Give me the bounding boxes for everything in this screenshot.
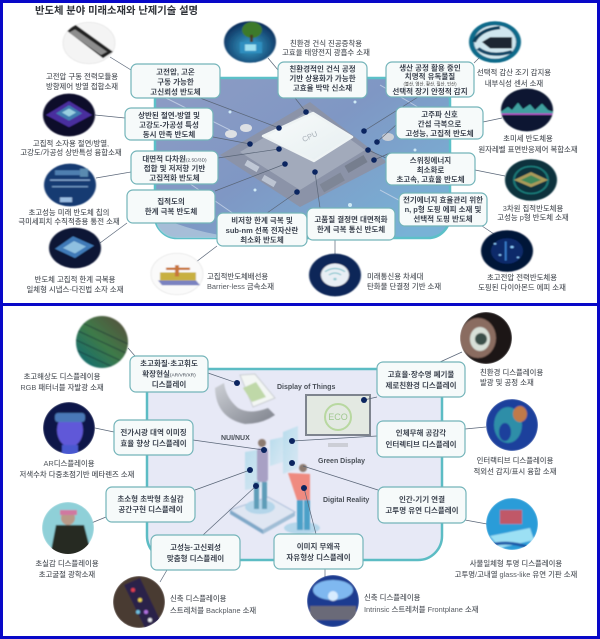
- box: switching energy: 스위칭에너지: [410, 155, 451, 165]
- box: toxic gas monitoring: 선택적 장기 안정적 감지: [392, 86, 468, 96]
- central display illustration: [147, 369, 442, 560]
- labels: 초고성능 미래 반도체 칩의: [29, 208, 109, 217]
- labels: 탄화물 단결정 기반 소재: [367, 282, 441, 291]
- icon: corrosion sensor: [469, 21, 521, 63]
- labels: 초실감 디스플레이용: [35, 559, 99, 568]
- panel: semiconductor materials: [3, 3, 597, 303]
- box: ultra-high resolution: 디스플레이: [152, 379, 186, 389]
- box: human-machine: 고투명 유연 디스플레이: [385, 505, 459, 515]
- box: ultra-thin: [106, 487, 195, 522]
- box: integration limit: [127, 190, 215, 223]
- icon: eye: [460, 312, 512, 364]
- central display illustration: Display of Things: [277, 384, 335, 391]
- box: electric energy: [399, 193, 487, 226]
- central display illustration: NUI/NUX: [221, 435, 250, 442]
- icon: stretchable frontplane: [307, 575, 359, 627]
- icon: diamond epi: [481, 230, 533, 272]
- icon: stretchable backplane: [113, 576, 165, 628]
- central display illustration: Green Display: [318, 458, 365, 465]
- box: contradictory properties: 동시 만족 반도체: [143, 129, 195, 139]
- labels: 고성능 p형 반도체 소재: [497, 213, 569, 222]
- labels: 저색수차 다중초점기반 메타렌즈 소재: [20, 470, 135, 479]
- labels: 스트레처블 Backplane 소재: [170, 606, 256, 615]
- box: integration limit: 한계 극복 반도체: [145, 206, 197, 216]
- box: eco: 제로친환경 디스플레이: [385, 380, 457, 390]
- box: contradictory properties: [125, 108, 213, 140]
- labels: 초미세 반도체용: [503, 134, 553, 143]
- labels: 사물일체형 투명 디스플레이용: [470, 559, 562, 568]
- box: large-area 3D: 접합 및 저저항 기반: [144, 163, 205, 173]
- box: high performance: 맞춤형 디스플레이: [167, 553, 224, 563]
- icon: transparent display: [486, 498, 538, 550]
- box: eco: 고효율·장수명 폐기물: [388, 369, 454, 379]
- labels: 적외선 감지/표시 융합 소재: [473, 467, 557, 476]
- box: visible band: [114, 420, 193, 455]
- labels: 미래통신용 차세대: [367, 272, 424, 281]
- box: toxic gas monitoring: (불산, 염산, 황산, 질산, 인산): [403, 80, 457, 88]
- box: high performance: [151, 535, 240, 570]
- box: high voltage: 고신뢰성 반도체: [150, 86, 201, 96]
- labels: 인터랙티브 디스플레이용: [477, 456, 554, 465]
- box: toxic gas monitoring: 치명적 유독물질: [405, 71, 455, 81]
- box: visible band: 전가시광 대역 이미징: [120, 427, 187, 437]
- labels: 방향제어 방열 접합소재: [46, 82, 118, 91]
- labels: 고집적 소자용 절연/방열,: [33, 139, 109, 148]
- labels: 친환경 건식 진공증착용: [290, 39, 362, 48]
- box: integration limit: 집적도의: [157, 196, 185, 206]
- box: free form: 자유형상 디스플레이: [286, 552, 351, 562]
- box: switching energy: 최소화로: [417, 164, 444, 174]
- box: dry process: [278, 62, 367, 98]
- labels: 초고굴절 광학소재: [39, 570, 95, 579]
- labels: AR디스플레이용: [43, 459, 95, 468]
- box: large-area 3D: 대면적 다차원(2.5D/3D): [142, 154, 207, 164]
- box: toxic gas monitoring: 생산 공정 활용 중인: [399, 62, 461, 72]
- people and holographic panels: [230, 426, 320, 534]
- labels: 원자레벨 표면반응제어 복합소재: [478, 145, 578, 154]
- icon: barrier-less metal: [151, 253, 203, 295]
- box: human-machine: 인간-기기 연결: [399, 494, 445, 504]
- labels: 3차원 집적반도체용: [503, 204, 563, 213]
- box: high frequency: 고주파 신호: [421, 109, 458, 119]
- labels: 고효율 태양전지 광흡수 소재: [282, 48, 370, 57]
- box: quality crystal: 고품질 결정면 대면적화: [314, 214, 388, 224]
- flexible display: [215, 374, 275, 424]
- central display illustration: Digital Reality: [323, 497, 369, 504]
- icon: infrared map: [486, 399, 538, 451]
- boxes and labels: semiconductor challenges: [18, 39, 578, 294]
- box: contradictory properties: 상반된 절연-방열 및: [138, 110, 200, 120]
- box: electric energy: n, p형 도핑 에피 소재 및: [405, 204, 482, 214]
- box: resistance limit: [217, 213, 307, 246]
- box: switching energy: 초고속, 고효율 반도체: [396, 174, 465, 184]
- box: ultra-high resolution: 초고화질·초고휘도: [140, 358, 198, 368]
- box: electric energy: 전기에너지 효율관리 위한: [403, 194, 483, 204]
- box: interactive: [377, 421, 465, 457]
- icon: 3D chip: [505, 159, 557, 201]
- box: visible band: 효율 향상 디스플레이: [120, 438, 187, 448]
- box: contradictory properties: 고강도-가공성 특성: [139, 120, 199, 130]
- box: free form: 이미지 무왜곡: [297, 541, 340, 551]
- box: high frequency: 고성능, 고집적 반도체: [405, 128, 474, 138]
- icon: realistic VR user: [42, 502, 94, 556]
- box: resistance limit: 최소화 반도체: [240, 234, 284, 244]
- box: toxic gas monitoring: [386, 62, 474, 97]
- labels: 극미세피치 수직적층용 통전 소재: [18, 217, 120, 226]
- CPU chip: [263, 113, 352, 161]
- labels: 고투명/고내열 glass-like 유연 기판 소재: [455, 570, 578, 579]
- box: quality crystal: [307, 208, 395, 240]
- labels: 고전압 구동 전력모듈용: [46, 72, 118, 81]
- labels: 발광 및 공정 소재: [480, 378, 534, 387]
- box: interactive: 인터렉티브 디스플레이: [385, 439, 457, 449]
- box: interactive: 인체무해 공감각: [396, 428, 446, 438]
- box: ultra-high resolution: [130, 356, 208, 392]
- boxes and labels: display challenges: [20, 356, 578, 615]
- icon: synapse chip: [49, 228, 101, 268]
- box: quality crystal: 한계 극복 통신 반도체: [317, 224, 385, 234]
- labels: [20, 368, 578, 615]
- panel: display materials: [3, 306, 597, 636]
- central CPU illustration: [155, 78, 450, 239]
- labels: 내부식성 센서 소재: [485, 79, 543, 88]
- icon: atomic wave: [500, 89, 555, 131]
- labels: Intrinsic 스트레처블 Frontplane 소재: [364, 605, 479, 614]
- labels: 초고전압 전력반도체용: [487, 273, 557, 282]
- box: ultra-thin: 공간구현 디스플레이: [118, 504, 183, 514]
- box: resistance limit: 비저항 한계 극복 및: [231, 215, 293, 225]
- box: high voltage: 구동 가능한: [157, 76, 194, 86]
- labels: 반도체 고집적 한계 극복용: [35, 275, 116, 284]
- CPU chip: CPU: [301, 129, 319, 144]
- icon: AR head: [43, 402, 95, 455]
- box: large-area 3D: 고집적화 반도체: [149, 172, 200, 182]
- labels: 초고해상도 디스플레이용: [24, 372, 101, 381]
- eco monitor: [306, 395, 370, 447]
- labels: 일체형 시냅스-다진법 소자 소재: [26, 285, 124, 294]
- labels: [18, 39, 578, 294]
- box: high voltage: 고전압, 고온: [156, 66, 195, 76]
- labels: 고강도/가공성 상반특성 융합소재: [20, 148, 122, 157]
- connector lines and dots: [84, 348, 487, 582]
- box: free form: [274, 534, 363, 569]
- connector lines and dots: [95, 57, 505, 262]
- title: 반도체 분야 미래소재와 난제기술 설명: [35, 4, 198, 17]
- box: resistance limit: sub-nm 선폭 전자산란: [226, 225, 298, 235]
- icon: power module: [63, 22, 115, 64]
- labels: 신축 디스플레이용: [170, 594, 227, 603]
- box: large-area 3D: [131, 151, 218, 184]
- box: high voltage: [131, 64, 220, 98]
- icon: fine pitch chip: [44, 164, 96, 206]
- labels: 고집적반도체배선용: [207, 272, 268, 281]
- labels: RGB 패터너블 자발광 소재: [20, 383, 104, 392]
- box: high performance: 고성능·고신뢰성: [170, 542, 221, 552]
- box: high frequency: [396, 107, 483, 139]
- box: eco: [377, 362, 465, 397]
- box: ultra-thin: 초소형 초박형 초실감: [117, 494, 184, 504]
- icon: RGB pattern: [76, 316, 128, 374]
- labels: 신축 디스플레이용: [364, 593, 421, 602]
- eco monitor: ECO: [328, 412, 348, 422]
- box: dry process: 기반 상용화가 가능한: [289, 73, 356, 83]
- box: dry process: 고효율 박막 신소재: [293, 82, 352, 92]
- box: high frequency: 간섭 극복으로: [418, 118, 461, 128]
- icon: solar absorber: [224, 21, 276, 63]
- box: human-machine: [378, 487, 466, 523]
- box: dry process: 친환경적인 건식 공정: [289, 64, 356, 74]
- box: electric energy: 선택적 도핑 반도체: [413, 214, 473, 224]
- labels: 친환경 디스플레이용: [480, 368, 543, 377]
- icon: single crystal wifi: [309, 254, 361, 296]
- icon: insulating chip: [43, 94, 95, 136]
- box: switching energy: [386, 153, 475, 185]
- box: ultra-high resolution: 확장현실(AR/VR/XR): [142, 368, 196, 378]
- labels: Barrier-less 금속소재: [207, 282, 274, 291]
- labels: 선택적 감산 조기 감지용: [477, 68, 551, 77]
- labels: 도핑된 다이아몬드 에피 소재: [478, 283, 566, 292]
